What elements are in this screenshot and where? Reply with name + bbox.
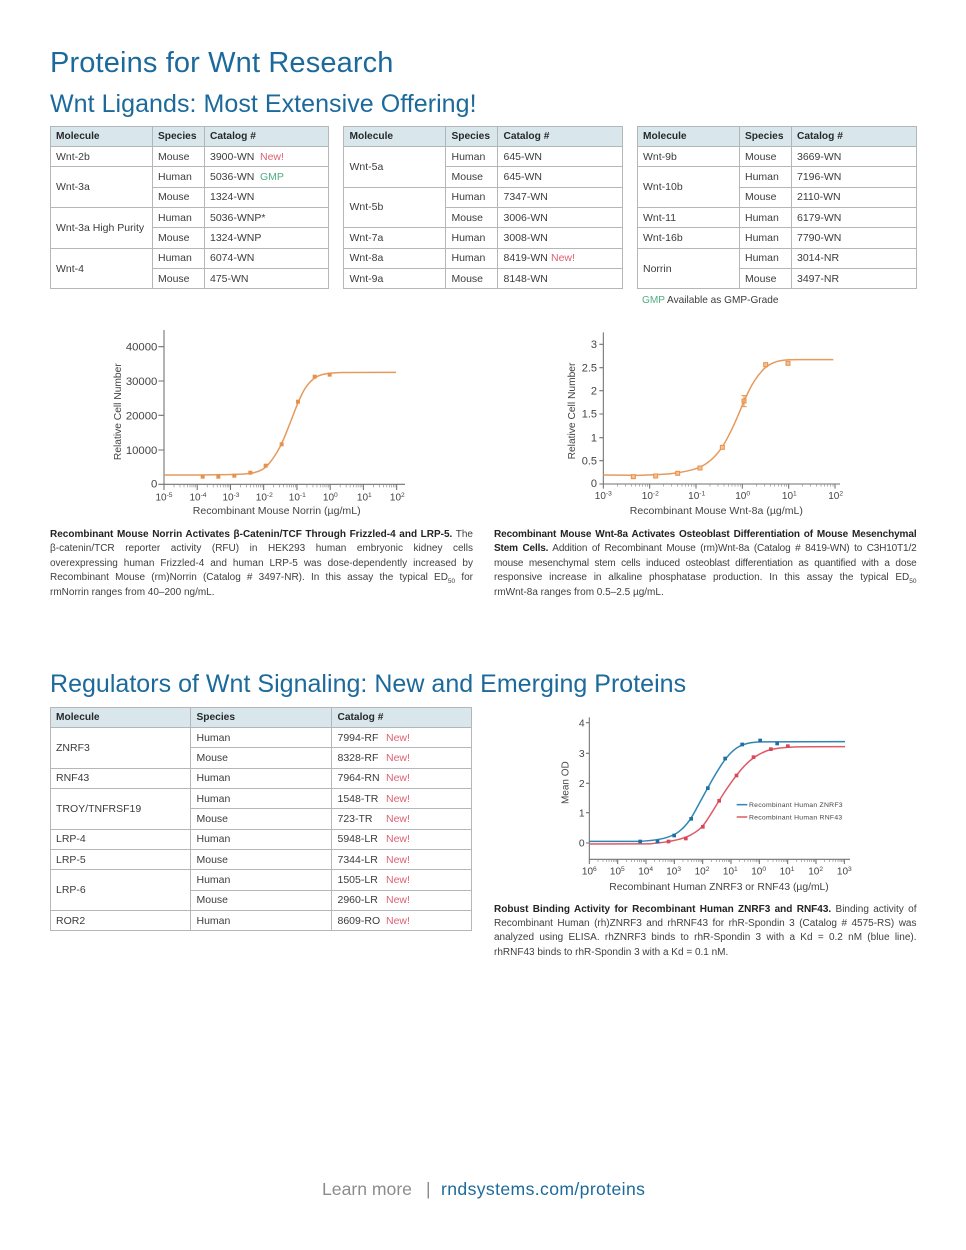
chart: Norrin dose response: [113, 330, 405, 517]
table: regulators: Mouse: [196, 854, 228, 866]
caption: Norrin: Recombinant Mouse Norrin Activates β-Catenin/TCF Through Frizzled-4 and LRP-5. The: [50, 529, 473, 540]
chart: Wnt-8a dose response: 10: [828, 491, 839, 502]
chart: Wnt-8a dose response: -3: [606, 491, 612, 498]
chart: Wnt-8a dose response: 1.5: [582, 409, 597, 421]
chart: Wnt-8a dose response: -2: [653, 491, 659, 498]
heading: Regulators: Regulators of Wnt Signaling: New and Emerging Proteins: [50, 670, 686, 698]
chart: ZNRF3 and RNF43 binding: 3: [677, 866, 681, 873]
chart: Wnt-8a dose response: 10: [688, 491, 699, 502]
table: Wnt ligands column 2: Wnt-9a: [350, 273, 383, 285]
chart: Wnt-8a dose response: 0: [746, 491, 750, 498]
chart: ZNRF3 and RNF43 binding: 6: [593, 866, 597, 873]
table: regulators: ZNRF3: [56, 742, 90, 754]
table: Wnt ligands column 3: Human: [745, 252, 779, 264]
table: regulators: New!: [386, 772, 410, 784]
chart: Wnt-8a dose response: 3: [591, 339, 597, 351]
chart: ZNRF3 and RNF43 binding: 10: [666, 866, 677, 877]
chart: Norrin dose response: 10: [189, 492, 201, 503]
chart: ZNRF3 and RNF43 binding: 4: [649, 866, 653, 873]
table: regulators: New!: [386, 894, 410, 906]
table: Wnt ligands column 2: Mouse: [452, 273, 483, 285]
table: Wnt ligands column 1: Mouse: [158, 273, 190, 285]
table: regulators: LRP-4: [56, 833, 86, 845]
caption: binding: rhRNF43 binds to rhR-Spondin 3 with a Kd = 0.1 nM.: [494, 947, 728, 958]
table: regulators: New!: [386, 732, 410, 744]
table: Wnt ligands column 3: Mouse: [745, 273, 777, 285]
chart legend: [737, 802, 843, 821]
table: Wnt ligands column 1: Human: [158, 252, 192, 264]
table: regulators: Human: [196, 793, 230, 805]
table: regulators: LRP-5: [56, 854, 86, 866]
chart: ZNRF3 and RNF43 binding: Recombinant Human ZNRF3 or RNF43 (µg/mL): [609, 882, 829, 893]
chart: ZNRF3 and RNF43 binding: Mean OD: [561, 761, 572, 804]
caption: binding: Robust Binding Activity for Recombinant Human ZNRF3 and RNF43. Binding activity of: [494, 904, 916, 914]
table: regulators: 1505-LR: [338, 874, 378, 886]
table: regulators: Mouse: [196, 894, 228, 906]
chart: Norrin dose response: 10000: [126, 445, 157, 457]
table: regulators: 8328-RF: [338, 752, 378, 764]
chart: ZNRF3 and RNF43 binding: 2: [819, 866, 823, 873]
caption: binding: [494, 904, 917, 958]
table: regulators: New!: [386, 793, 410, 805]
chart: Wnt-8a dose response: 10: [642, 491, 653, 502]
table: Wnt ligands column 2: Mouse: [452, 171, 483, 183]
table: Wnt ligands column 1: Wnt-4: [56, 263, 84, 275]
table: Wnt ligands column 3: Molecule: [643, 131, 687, 142]
table: Wnt ligands column 2: 645-WN: [504, 171, 542, 183]
chart: Norrin dose response: 10: [289, 492, 300, 503]
chart: ZNRF3 and RNF43 binding: 3: [848, 866, 852, 873]
caption: Norrin: [50, 529, 473, 598]
table: Wnt ligands column 3: Norrin: [643, 263, 672, 275]
caption: binding: analyzed using ELISA. rhZNRF3 binds to rhR-Spondin 3 with a Kd = 0.2 nM (blue line).: [494, 932, 916, 943]
caption: Norrin: Recombinant Mouse (rm)Norrin (Catalog # 3497-NR). In this assay the typical ED50 for: [50, 572, 473, 585]
table: Wnt ligands column 2: Human: [452, 151, 485, 163]
chart: Norrin dose response: -3: [234, 492, 240, 499]
caption: Norrin: β-catenin/TCR reporter activity (RFU) in HEK293 human embryonic kidney cells: [50, 543, 473, 554]
GMP legend note: GMP Available as GMP-Grade: [642, 294, 779, 306]
table: Wnt ligands column 3: Wnt-9b: [643, 151, 677, 163]
table: Wnt ligands column 2: Wnt-5b: [350, 201, 383, 213]
table: Wnt ligands column 3: Wnt-11: [643, 212, 676, 224]
table: Wnt ligands column 3: 3669-WN: [797, 151, 841, 163]
table: Wnt ligands column 1: Mouse: [158, 191, 190, 203]
chart: Norrin dose response: -5: [167, 492, 173, 499]
table: regulators: 2960-LR: [338, 894, 378, 906]
table: Wnt ligands column 3: 2110-WN: [797, 191, 841, 203]
table: Wnt ligands column 1: 5036-WNP*: [210, 212, 265, 224]
chart: Wnt-8a dose response: 2: [839, 491, 843, 498]
heading: Wnt Ligands: Wnt Ligands: Most Extensive Offering!: [50, 90, 477, 118]
table: regulators: Human: [196, 732, 230, 744]
table: regulators: LRP-6: [56, 884, 86, 896]
table: Wnt ligands column 2: 8419-WN: [504, 252, 548, 264]
chart: Norrin dose response: 10: [256, 492, 267, 503]
table: Wnt ligands column 1: Molecule: [56, 131, 100, 142]
chart legend: Recombinant Human ZNRF3: [749, 802, 843, 809]
table: regulators: Human: [196, 915, 230, 927]
table: Wnt ligands column 2: 8148-WN: [504, 273, 548, 285]
chart: Wnt-8a dose response: Relative Cell Number: [567, 362, 578, 459]
table: Wnt ligands column 1: 475-WN: [210, 273, 249, 285]
chart: Norrin dose response: 10: [222, 492, 234, 503]
chart: Wnt-8a dose response: [567, 332, 843, 517]
table: Wnt ligands column 2: Species: [452, 131, 490, 142]
table: regulators: New!: [386, 833, 410, 845]
table: regulators: Human: [196, 772, 230, 784]
table: regulators: New!: [386, 752, 410, 764]
footer: learn more link: Learn more: [322, 1179, 412, 1199]
chart: Wnt-8a dose response: 2: [591, 385, 597, 397]
chart: ZNRF3 and RNF43 binding: 0: [579, 839, 585, 850]
chart: ZNRF3 and RNF43 binding: 10: [780, 866, 791, 877]
table: Wnt ligands column 1: New!: [260, 151, 284, 163]
chart: Norrin dose response: 10: [357, 492, 368, 503]
table: Wnt ligands column 3: Human: [745, 232, 779, 244]
table: Wnt ligands column 2: Human: [452, 232, 485, 244]
table: regulators: TROY/TNFRSF19: [56, 803, 141, 815]
table: Wnt ligands column 3: 3497-NR: [797, 273, 839, 285]
table: Wnt ligands column 2: Wnt-7a: [350, 232, 383, 244]
table: Wnt ligands column 3: 3014-NR: [797, 252, 839, 264]
table: Wnt ligands column 1: Species: [158, 131, 197, 142]
chart: Norrin dose response: 0: [334, 492, 338, 499]
table: regulators: New!: [386, 854, 410, 866]
table: Wnt ligands column 2: Wnt-5a: [350, 161, 383, 173]
chart: ZNRF3 and RNF43 binding: 10: [638, 866, 649, 877]
table: regulators: 7994-RF: [338, 732, 378, 744]
table: Wnt ligands column 3: Wnt-16b: [643, 232, 683, 244]
chart: ZNRF3 and RNF43 binding: 4: [579, 718, 585, 729]
chart: ZNRF3 and RNF43 binding: 10: [582, 866, 593, 877]
caption: Wnt-8a: responsive increase in alkaline phosphatase production. In this assay the typical ED50: [494, 572, 916, 585]
table: Wnt ligands column 3: [637, 126, 917, 289]
table: regulators: 7964-RN: [338, 772, 380, 784]
chart: Norrin dose response: -4: [201, 492, 207, 499]
table: Wnt ligands column 2: Wnt-8a: [350, 252, 383, 264]
chart: Wnt-8a dose response: 0: [591, 478, 597, 490]
footer: learn more link: rndsystems.com/proteins: [441, 1179, 645, 1199]
footer: learn more link: [322, 1179, 645, 1199]
chart: ZNRF3 and RNF43 binding: 2: [706, 866, 710, 873]
chart: Norrin dose response: 10: [155, 492, 167, 503]
chart: Norrin dose response: 0: [151, 479, 157, 491]
chart: ZNRF3 and RNF43 binding: 10: [610, 866, 621, 877]
table: Wnt ligands column 2: Mouse: [452, 212, 483, 224]
table: Wnt ligands column 1: Wnt-2b: [56, 151, 90, 163]
chart: Wnt-8a dose response: -1: [699, 491, 705, 498]
chart: Norrin dose response: Relative Cell Number: [113, 363, 124, 460]
table: regulators: Catalog #: [338, 712, 383, 723]
chart: Wnt-8a dose response: 2.5: [582, 362, 597, 374]
chart: ZNRF3 and RNF43 binding: 10: [723, 866, 734, 877]
table: Wnt ligands column 3: 7790-WN: [797, 232, 841, 244]
table: regulators: 8609-RO: [338, 915, 380, 927]
table: regulators: 5948-LR: [338, 833, 378, 845]
table: Wnt ligands column 3: Human: [745, 212, 779, 224]
table: Wnt ligands column 3: Mouse: [745, 151, 777, 163]
table: Wnt ligands column 1: [50, 126, 329, 289]
table: Wnt ligands column 2: Catalog #: [504, 131, 549, 142]
caption: Wnt-8a: mouse mesenchymal stem cells induced osteoblast differentiation as quantified with a dose: [494, 558, 916, 569]
table: regulators: 1548-TR: [338, 793, 378, 805]
table: Wnt ligands column 3: Wnt-10b: [643, 181, 683, 193]
chart: ZNRF3 and RNF43 binding: 2: [579, 779, 585, 790]
table: Wnt ligands column 3: Catalog #: [797, 131, 843, 142]
chart: Norrin dose response: 1: [368, 492, 372, 499]
table: Wnt ligands column 1: Catalog #: [210, 131, 256, 142]
table: regulators: Species: [196, 712, 235, 723]
table: regulators: New!: [386, 813, 410, 825]
table: Wnt ligands column 1: 3900-WN: [210, 151, 254, 163]
chart: Norrin dose response: 20000: [126, 410, 157, 422]
caption: Norrin: rmNorrin ranges from 40–200 ng/mL.: [50, 587, 215, 598]
table: Wnt ligands column 2: 3008-WN: [504, 232, 548, 244]
table: Wnt ligands column 2: Molecule: [350, 131, 393, 142]
chart legend: Recombinant Human RNF43: [749, 814, 842, 821]
table: Wnt ligands column 1: 5036-WN: [210, 171, 254, 183]
table: Wnt ligands column 2: Human: [452, 191, 485, 203]
table: regulators: Human: [196, 874, 230, 886]
table: Wnt ligands column 1: Mouse: [158, 232, 190, 244]
caption: Norrin: overexpressing human Frizzled-4 and human LRP-5 was dose-dependently increased by: [50, 558, 473, 569]
table: regulators: [50, 707, 472, 931]
table: Wnt ligands column 3: Species: [745, 131, 784, 142]
caption: binding: Recombinant Human (rh)ZNRF3 and rhRNF43 for rhR-Spondin 3 (Catalog # 4575-RS) was: [494, 918, 916, 929]
chart: Norrin dose response: 10: [323, 492, 334, 503]
chart: Wnt-8a dose response: Recombinant Mouse Wnt-8a (µg/mL): [630, 505, 803, 517]
chart: Norrin dose response: -2: [267, 492, 273, 499]
table: Wnt ligands column 2: [343, 126, 623, 289]
table: Wnt ligands column 2: 7347-WN: [504, 191, 548, 203]
chart: Wnt-8a dose response: 10: [735, 491, 746, 502]
chart: Norrin dose response: Recombinant Mouse Norrin (µg/mL): [193, 505, 361, 517]
table: Wnt ligands column 3: 6179-WN: [797, 212, 841, 224]
chart: ZNRF3 and RNF43 binding: 1: [791, 866, 795, 873]
table: regulators: Mouse: [196, 813, 228, 825]
chart: ZNRF3 and RNF43 binding: 1: [579, 808, 585, 819]
chart: Wnt-8a dose response: 10: [782, 491, 793, 502]
caption: Wnt-8a: [494, 529, 916, 598]
chart: Norrin dose response: 2: [401, 492, 405, 499]
caption: Wnt-8a: rmWnt-8a ranges from 0.5–2.5 µg/mL.: [494, 587, 664, 598]
chart: Wnt-8a dose response: 10: [595, 491, 606, 502]
caption: Wnt-8a: Recombinant Mouse Wnt-8a Activates Osteoblast Differentiation of Mouse Mesenchymal: [494, 529, 916, 540]
table: Wnt ligands column 1: 1324-WN: [210, 191, 254, 203]
chart: ZNRF3 and RNF43 binding: [561, 717, 852, 893]
table: Wnt ligands column 2: 3006-WN: [504, 212, 548, 224]
chart: Norrin dose response: 40000: [126, 341, 157, 353]
table: Wnt ligands column 2: Human: [452, 252, 485, 264]
chart: ZNRF3 and RNF43 binding: 10: [695, 866, 706, 877]
table: Wnt ligands column 1: Human: [158, 171, 192, 183]
chart: Wnt-8a dose response: 1: [793, 491, 797, 498]
table: Wnt ligands column 1: 6074-WN: [210, 252, 254, 264]
chart: Wnt-8a dose response: 0.5: [582, 455, 597, 467]
table: Wnt ligands column 1: Human: [158, 212, 192, 224]
table: regulators: ROR2: [56, 915, 85, 927]
chart: Norrin dose response: 30000: [126, 376, 157, 388]
table: regulators: New!: [386, 874, 410, 886]
table: regulators: New!: [386, 915, 410, 927]
chart: ZNRF3 and RNF43 binding: 10: [808, 866, 819, 877]
table: Wnt ligands column 3: Mouse: [745, 191, 777, 203]
table: regulators: Mouse: [196, 752, 228, 764]
table: Wnt ligands column 1: Wnt-3a High Purity: [56, 222, 144, 234]
table: Wnt ligands column 1: GMP: [260, 171, 284, 183]
chart: Wnt-8a dose response: 1: [591, 432, 597, 444]
table: regulators: 723-TR: [338, 813, 373, 825]
table: Wnt ligands column 2: New!: [551, 252, 575, 264]
chart: Norrin dose response: -1: [300, 492, 306, 499]
table: Wnt ligands column 3: 7196-WN: [797, 171, 841, 183]
table: regulators: Human: [196, 833, 230, 845]
chart: ZNRF3 and RNF43 binding: 1: [734, 866, 738, 873]
table: Wnt ligands column 1: Mouse: [158, 151, 190, 163]
caption: Wnt-8a: Stem Cells. Addition of Recombinant Mouse (rm)Wnt-8a (Catalog # 8419-WN) to C3H10T1/2: [494, 543, 916, 554]
chart: ZNRF3 and RNF43 binding: 5: [621, 866, 625, 873]
table: Wnt ligands column 1: Wnt-3a: [56, 181, 90, 193]
chart: Norrin dose response: 10: [390, 492, 401, 503]
table: regulators: Molecule: [56, 712, 100, 723]
chart: ZNRF3 and RNF43 binding: 3: [579, 749, 585, 760]
table: Wnt ligands column 2: 645-WN: [504, 151, 542, 163]
footer: learn more link: |: [426, 1179, 431, 1199]
table: regulators: 7344-LR: [338, 854, 378, 866]
table: regulators: RNF43: [56, 772, 89, 784]
chart: ZNRF3 and RNF43 binding: 0: [762, 866, 766, 873]
chart: ZNRF3 and RNF43 binding: 10: [751, 866, 762, 877]
table: Wnt ligands column 1: 1324-WNP: [210, 232, 261, 244]
title: Proteins for Wnt Research: [50, 47, 394, 79]
table: Wnt ligands column 3: Human: [745, 171, 779, 183]
chart: ZNRF3 and RNF43 binding: 10: [837, 866, 848, 877]
